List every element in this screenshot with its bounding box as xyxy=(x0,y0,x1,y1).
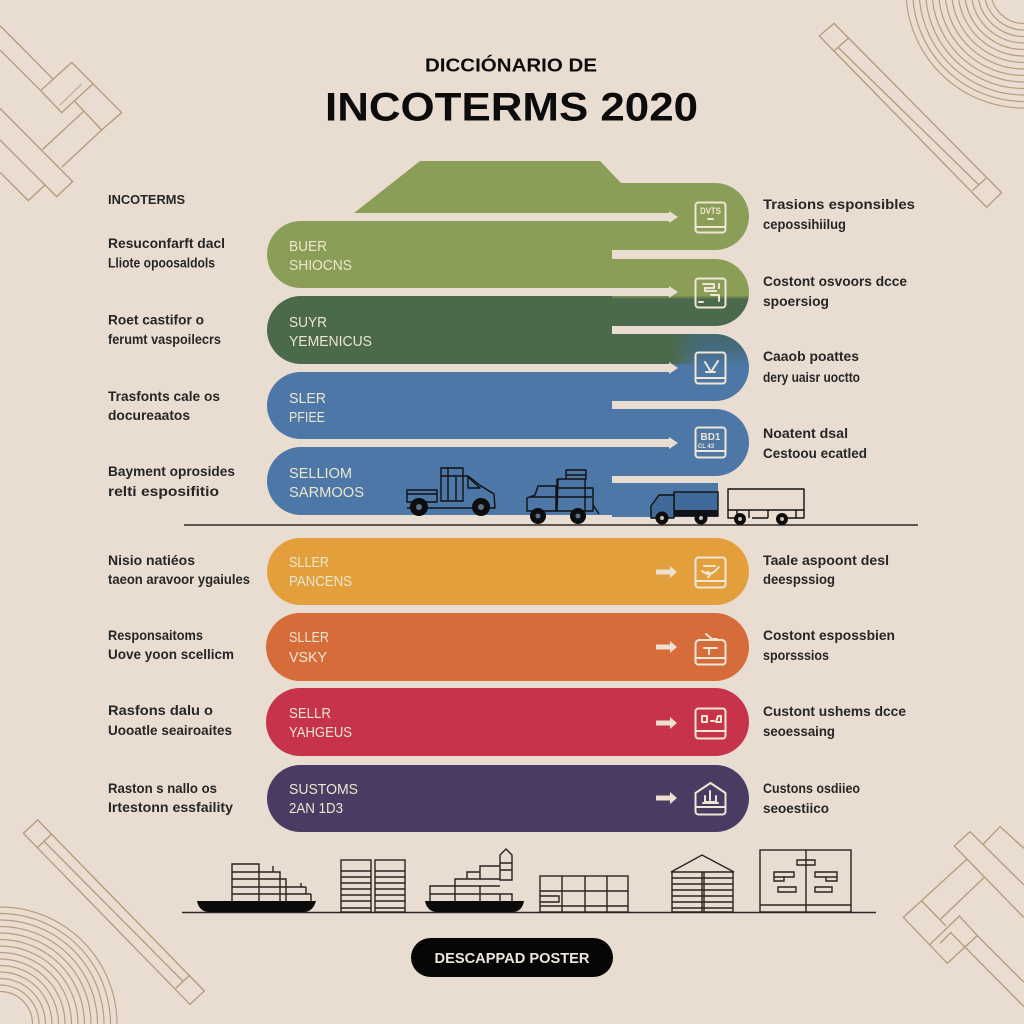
band labels: 2AN 1D3 xyxy=(289,800,343,817)
band labels: SLLER xyxy=(289,554,329,571)
right column text: spoersiog xyxy=(763,293,829,309)
right column text: Taale aspoont desl xyxy=(763,552,889,568)
title: INCOTERMS 2020 xyxy=(325,86,698,130)
band: blue xyxy=(267,372,612,439)
left column text: docureaatos xyxy=(108,407,190,423)
icon: truck 1 xyxy=(407,468,495,516)
panel: stacked responsibility bands (upper) xyxy=(267,161,749,517)
decoration: top-right bar xyxy=(819,23,1002,207)
arrow: yellow xyxy=(656,566,677,578)
band: dark green xyxy=(267,296,612,364)
icon: org chart box xyxy=(760,850,851,912)
decoration: top-left geometric lines xyxy=(0,26,122,201)
right column text: Costont osvoors dcce xyxy=(763,273,907,289)
band: red xyxy=(266,688,749,756)
band: green to dark green xyxy=(612,259,749,326)
band labels: VSKY xyxy=(289,649,327,666)
left column text xyxy=(108,192,250,815)
right column text: seoestiico xyxy=(763,800,829,816)
icon: document 1 xyxy=(696,202,726,232)
left column text: Responsaitoms xyxy=(108,627,203,643)
band: purple xyxy=(267,765,749,832)
band: blue right 1 xyxy=(612,334,749,401)
left column text: Uove yoon scellicm xyxy=(108,646,234,662)
icon: document 4: CL 43 xyxy=(698,444,715,450)
left column text: ferumt vaspoilecrs xyxy=(108,331,221,347)
decoration: top-right arcs xyxy=(906,0,1024,108)
band labels: YAHGEUS xyxy=(289,724,352,741)
left column text: Trasfonts cale os xyxy=(108,388,220,404)
left column text: Uooatle seairoaites xyxy=(108,722,232,738)
right column text: Trasions esponsibles xyxy=(763,196,915,212)
right column text: Costont espossbien xyxy=(763,627,895,643)
icon: truck 3 xyxy=(651,492,718,524)
band labels: SUSTOMS xyxy=(289,781,358,798)
right column text: Noatent dsal xyxy=(763,425,848,441)
left column text: Rasfons dalu o xyxy=(108,702,213,718)
icon: document 4: BD1 xyxy=(700,432,721,443)
right column text: Custons osdiieo xyxy=(763,780,860,796)
left column text: relti esposifitio xyxy=(108,483,219,499)
decoration: bottom-left bar xyxy=(23,820,204,1004)
left column text: Irtestonn essfaility xyxy=(108,799,233,815)
arrow 4 xyxy=(301,437,678,449)
left column text: taeon aravoor ygaiules xyxy=(108,571,250,587)
arrow 1 xyxy=(354,211,678,223)
arrow 3 xyxy=(301,362,678,374)
decoration: bottom-left arcs xyxy=(0,907,117,1024)
right column text xyxy=(763,196,915,816)
right column text: seoessaing xyxy=(763,723,835,739)
band labels: SUYR xyxy=(289,314,327,331)
right column text: sporsssios xyxy=(763,647,829,663)
left column text: Resuconfarft dacl xyxy=(108,235,225,251)
icon: container stack xyxy=(341,860,405,912)
band: dark green extension xyxy=(612,334,700,364)
band: yellow xyxy=(267,538,749,605)
ground line lower xyxy=(182,912,876,914)
icon: document 5 xyxy=(696,558,726,588)
icon: house document 8 xyxy=(695,783,726,815)
icon: document 4 xyxy=(696,428,726,458)
right column text: deespssiog xyxy=(763,571,835,587)
ground line upper xyxy=(184,524,918,526)
arrow 2 xyxy=(301,286,678,298)
right column text: Cestoou ecatled xyxy=(763,445,867,461)
panel: coloured bands (lower) xyxy=(266,538,749,832)
arrow: red xyxy=(656,717,677,729)
band labels: SHIOCNS xyxy=(289,257,352,274)
left column text: Roet castifor o xyxy=(108,312,204,328)
band labels: PFIEE xyxy=(289,409,325,426)
right column text: cepossihiilug xyxy=(763,216,846,232)
band labels: PANCENS xyxy=(289,573,352,590)
band: orange xyxy=(266,613,749,681)
decoration: bottom-right geometric lines xyxy=(903,827,1024,1007)
left column text: Bayment oprosides xyxy=(108,463,235,479)
button: poster xyxy=(411,938,613,977)
left column text: Nisio natiéos xyxy=(108,552,195,568)
band labels: SELLIOM xyxy=(289,465,352,482)
icon: document 3 xyxy=(696,352,726,384)
band: blue lower xyxy=(267,447,718,517)
band labels: SELLR xyxy=(289,705,331,722)
icon: warehouse xyxy=(671,855,734,912)
left column text: Raston s nallo os xyxy=(108,780,217,796)
icon: document 2 xyxy=(696,278,726,308)
icon: document 1: DVTS xyxy=(700,206,721,216)
icon: truck 2 xyxy=(527,470,599,524)
band: green top xyxy=(267,161,749,288)
arrow: purple xyxy=(656,792,677,804)
band labels: SLLER xyxy=(289,629,329,646)
band labels: SARMOOS xyxy=(289,484,364,501)
right column text: Caaob poattes xyxy=(763,348,859,364)
icon: document 6 xyxy=(695,634,726,665)
title xyxy=(325,54,698,130)
left column text: Lliote opoosaldols xyxy=(108,254,215,270)
band labels: YEMENICUS xyxy=(289,333,372,350)
button: poster: DESCAPPAD POSTER xyxy=(434,951,590,967)
title: DICCIÓNARIO DE xyxy=(425,54,597,76)
band labels xyxy=(289,238,372,817)
right column text: Custont ushems dcce xyxy=(763,703,906,719)
band labels: SLER xyxy=(289,390,326,407)
icon: document 7 xyxy=(696,708,726,738)
left column text: INCOTERMS xyxy=(108,192,185,207)
band labels: BUER xyxy=(289,238,327,255)
band: blue right 2 xyxy=(612,409,749,476)
icon: container ship 1 xyxy=(197,864,316,912)
icon: container grid xyxy=(540,876,628,912)
arrow: orange xyxy=(656,641,677,653)
icon: trailer xyxy=(728,489,804,525)
icon: container ship 2 xyxy=(425,849,524,912)
right column text: dery uaisr uoctto xyxy=(763,369,860,385)
